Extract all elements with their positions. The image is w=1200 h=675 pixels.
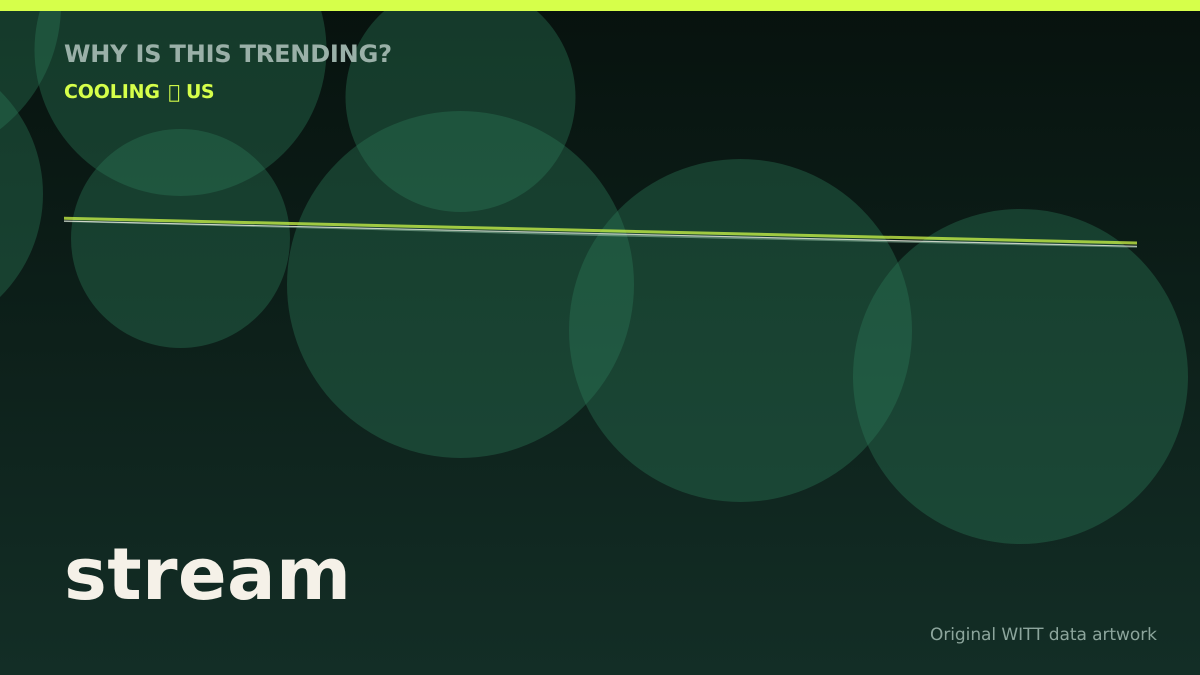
stream lines [64, 217, 1137, 248]
icon: missing glyph box [170, 86, 179, 101]
subheading: US [186, 81, 214, 103]
heading: WHY IS THIS TRENDING? [64, 40, 392, 68]
subheading: COOLING [64, 81, 160, 103]
subheading [64, 81, 214, 103]
top accent bar [0, 0, 1200, 11]
credit: Original WITT data artwork [930, 625, 1157, 645]
main word: stream [64, 532, 351, 616]
bubble cluster [0, 0, 1188, 544]
